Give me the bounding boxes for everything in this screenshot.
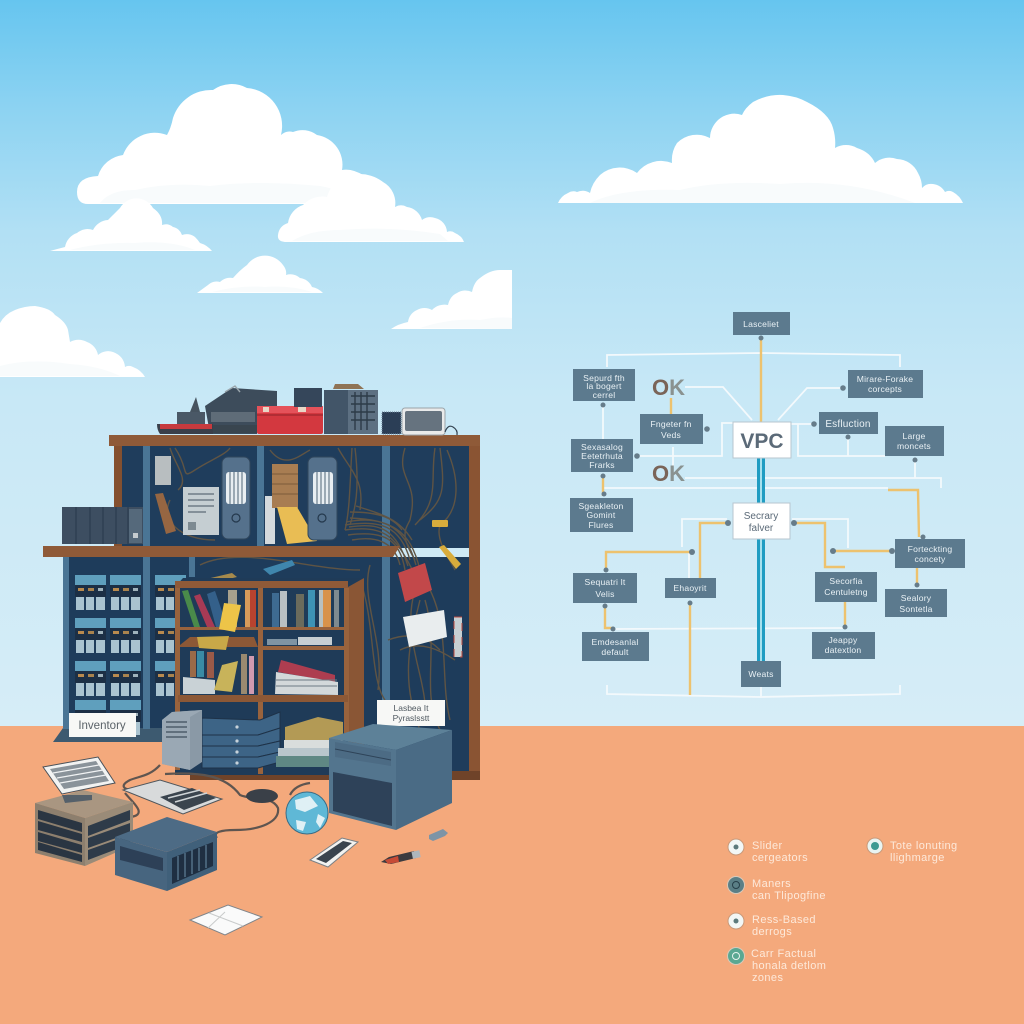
node: Esfluction [819,412,878,434]
shelving unit with clutter [35,312,965,984]
tower computer left [222,457,250,539]
node: Sequatri: Velis [595,589,615,599]
label: laptop it: Pyraslsstt [393,713,430,723]
label: inventory: Inventory [78,720,126,732]
cloud: large upper left [77,84,365,204]
vertical posts [63,446,390,729]
top clutter: small monitor [402,408,457,435]
beige server box [35,790,133,866]
lower right stack [276,717,343,767]
cables on floor [124,765,310,838]
node: Large: Large [903,431,926,441]
node: Sgeakleton [570,498,633,532]
node: Ehaoyrit [665,578,716,598]
node: Sgeakleton: Flures [588,520,614,530]
top clutter: tower with grid [324,384,378,434]
top clutter: red flat device [157,424,213,434]
node: Jeappy: Jeappy [829,635,858,645]
node: Large: moncets [897,441,931,451]
legend item: ress based [728,913,816,938]
globe [286,792,328,834]
node: VPC [733,422,791,458]
node: Sgeakleton: Gomint [587,510,616,520]
node: Forteckting: Forteckting [908,544,952,554]
blue backbone [757,458,765,661]
cloud: cut off at right edge [391,270,512,329]
node: Forteckting [895,539,965,568]
node: VPC: VPC [740,430,784,453]
node: Fngeter [640,414,703,444]
pinned paper [403,610,447,647]
node: Sequatri [573,573,637,603]
legend item: slider: Slider [752,840,783,852]
yellow notes [277,507,317,544]
smartphone [310,838,358,867]
items on top of bookcase [202,560,295,584]
binder labels [235,725,239,765]
node: Secrary: Secrary [744,511,778,522]
legend item: maners: Maners [752,878,791,890]
small card [155,456,171,485]
wooden bookcase [175,578,364,775]
node: Forteckting: concety [914,554,946,564]
books top right [272,590,339,627]
keyboard [123,780,222,814]
upper cabinet back panel [114,446,472,548]
legend item: ress based: Ress-Based [752,914,816,926]
top clutter: dark equipment stack [177,386,277,434]
node: Emdesanal: default [601,647,629,657]
ground [0,726,1024,1024]
legend item: slider: cergeators [752,852,808,864]
ok mark: upper: OK [652,375,685,400]
node: Secorfia: Secorfia [829,576,863,586]
books third shelf left [183,651,254,694]
node: Secrary [733,503,790,539]
node: Sealory: Sontetla [899,604,933,614]
legend item: maners [728,876,826,902]
side posts wood [114,446,122,546]
cabinet base [53,728,172,742]
node: Sexasalog: Frarks [589,460,615,470]
legend item: ress based: derrogs [752,926,792,938]
node: Sgeakleton: Sgeakleton [578,501,624,511]
yellow clips [432,520,461,569]
gray tower computer [162,710,202,770]
legend [728,838,958,984]
legend item: carr factual: zones [752,972,783,984]
cloud: large right [558,95,963,203]
sky background [0,0,1024,727]
red tag [398,563,432,602]
node: Emdesanal: Emdesanlal [592,637,638,647]
blue binders [202,712,280,768]
document panel [183,487,219,535]
node: Sexasalog [571,439,633,472]
node: Emdesanal [582,632,649,661]
legend item: carr factual: honala detlom [752,960,826,972]
label: inventory [69,713,136,737]
node: Jeappy [812,632,875,659]
node: Sexasalog: Sexasalog [581,442,623,452]
ok mark: lower: OK [652,461,685,486]
node: Lasceliet: Lasceliet [743,319,779,329]
cloud: middle [278,174,464,242]
tower computer right [308,457,337,540]
node: Esfluction: Esfluction [825,419,871,430]
node: Sequatri: Sequatri lt [585,577,626,587]
floor rail [190,771,480,780]
label: laptop it: Lasbea It [394,703,429,713]
leaning brown books [155,493,176,534]
top clutter: dark box [294,388,322,407]
cables [167,448,456,730]
usb stick [429,829,448,841]
node: Jeappy: datextlon [825,645,861,655]
top shelf plank [109,435,480,446]
cloud: far left [0,306,145,377]
node: Sealory [885,589,947,617]
node: Mirare-Forake [848,370,923,398]
legend item: tote: llighmarge [890,852,945,864]
node: Secorfia [815,572,877,602]
flat items second shelf [197,636,332,650]
node: Lasceliet [733,312,790,335]
top clutter: speckled block [382,412,401,434]
rack units [75,575,186,735]
node: Secrary: falver [749,523,774,534]
pen [381,850,421,864]
node: Mirare-Forake: Mirare-Forake [857,374,913,384]
node: Sexasalog: Eetetrhuta [581,451,623,461]
legend item: tote [867,838,958,864]
node: Sealory: Sealory [901,593,932,603]
connector nodes [600,336,926,632]
node: Sepurd fth [573,369,635,401]
node: Weats: Weats [748,669,774,679]
legend item: carr factual [728,948,826,984]
legend item: slider [728,839,808,864]
legend item: carr factual: Carr Factual [751,948,816,960]
middle shelf plank [43,546,400,557]
red and white stick [454,617,462,657]
node: Sepurd fth: la bogert [586,381,622,391]
node: Ehaoyrit: Ehaoyrit [673,583,707,593]
lower cabinet back panel [63,557,472,780]
top clutter: red case [257,406,323,434]
cloud: small centre [197,256,323,293]
white stick [265,496,275,544]
node: Sepurd fth: cerrel [593,390,615,400]
tablet on stand [43,757,115,803]
node: Secorfia: Centuletng [824,587,868,597]
cable tie blob [246,789,278,803]
label: laptop it [377,700,445,726]
legend item: tote: Tote lonuting [890,840,958,852]
node: Large [885,426,944,456]
cloud: small left [50,198,212,251]
node: Fngeter: Fngeter fn [650,419,692,429]
node: Mirare-Forake: corcepts [868,384,902,394]
brown box [272,464,298,508]
paper on floor [190,905,262,935]
large blue server case [329,724,452,830]
node: Sepurd fth: Sepurd fth [583,373,625,383]
books top left [182,590,256,632]
dark blue box [115,817,217,891]
stacked papers right [275,660,338,695]
node: Weats [741,661,781,687]
node: Fngeter: Veds [661,430,681,440]
legend item: maners: can Tlipogfine [752,890,826,902]
server rack row [62,507,143,544]
white connector lines [603,353,941,697]
network diagram [570,312,965,697]
yellow connector lines [603,340,919,695]
